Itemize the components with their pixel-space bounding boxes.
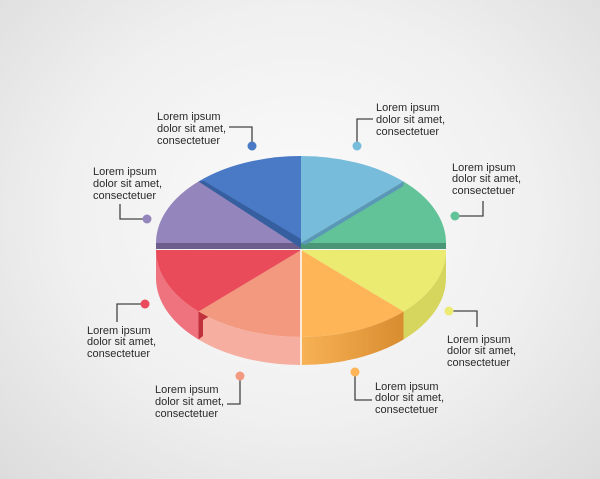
- label: purple: dolor sit amet,: [93, 178, 162, 190]
- label: salmon: Lorem ipsum: [155, 384, 219, 396]
- label: light blue: consectetuer: [376, 126, 439, 138]
- label: salmon: dolor sit amet,: [155, 396, 224, 408]
- label: green: Lorem ipsum: [452, 162, 516, 174]
- label: yellow: dolor sit amet,: [447, 345, 516, 357]
- label: blue: [157, 111, 256, 150]
- label: green: [450, 162, 521, 220]
- label: salmon: consectetuer: [155, 408, 218, 420]
- label: orange: [350, 368, 444, 416]
- lower half sides: [156, 250, 446, 365]
- label: red: [87, 300, 156, 360]
- label: yellow: Lorem ipsum: [447, 334, 511, 346]
- label: orange: consectetuer: [375, 404, 438, 416]
- label: purple: [93, 166, 162, 224]
- label: green: consectetuer: [452, 185, 515, 197]
- label: purple: consectetuer: [93, 190, 156, 202]
- label: light blue: Lorem ipsum: [376, 102, 440, 114]
- label: light blue: [352, 102, 445, 150]
- label: red: dolor sit amet,: [87, 336, 156, 348]
- label: orange: dolor sit amet,: [375, 392, 444, 404]
- label: green: dolor sit amet,: [452, 173, 521, 185]
- label: orange: Lorem ipsum: [375, 381, 439, 393]
- label: purple: Lorem ipsum: [93, 166, 157, 178]
- label: red: consectetuer: [87, 348, 150, 360]
- pie chart: [156, 156, 446, 365]
- label: blue: Lorem ipsum: [157, 111, 221, 123]
- label: blue: consectetuer: [157, 135, 220, 147]
- upper half: [156, 156, 446, 249]
- lower half tops: [156, 250, 446, 365]
- label: light blue: dolor sit amet,: [376, 114, 445, 126]
- label: salmon: [155, 372, 244, 420]
- label: yellow: consectetuer: [447, 357, 510, 369]
- label: red: Lorem ipsum: [87, 325, 151, 337]
- label: blue: dolor sit amet,: [157, 123, 226, 135]
- label: yellow: [444, 306, 516, 369]
